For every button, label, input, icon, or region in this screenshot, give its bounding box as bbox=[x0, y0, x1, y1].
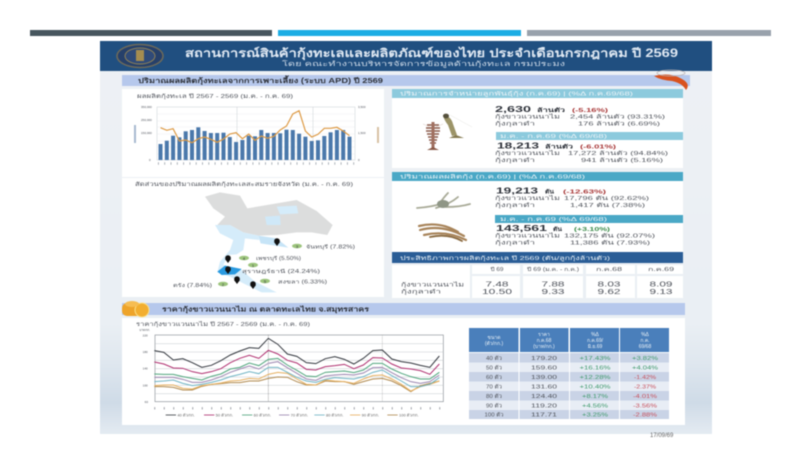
price table: +3.25% bbox=[582, 412, 608, 418]
price table: 80 ตัว bbox=[486, 393, 502, 400]
price table: 70 ตัว bbox=[486, 384, 502, 390]
price table bbox=[469, 328, 669, 419]
panel: price line chart bbox=[122, 318, 685, 425]
price table: (บาท/กก.) bbox=[533, 344, 555, 350]
price table: +12.28% bbox=[580, 375, 611, 381]
price table: มิ.ย.69 bbox=[588, 343, 602, 350]
combo bar and line chart: 0 bbox=[358, 158, 360, 162]
production heading: ปริมาณผลผลิตกุ้ง (ก.ค.69) | (%Δ ก.ค.69/68) bbox=[400, 174, 585, 180]
top accent bars bbox=[30, 30, 771, 36]
production year to date figures bbox=[495, 224, 655, 246]
panel: production efficiency table: 8.09 bbox=[650, 282, 673, 288]
price table: +3.82% bbox=[632, 356, 658, 362]
panel: shrimp output chart bbox=[122, 89, 384, 177]
panel: production efficiency table: ก.ค.68 bbox=[596, 267, 622, 273]
chart legend: 100 ตัว/กก. bbox=[399, 412, 419, 417]
price table: +10.40% bbox=[580, 384, 611, 390]
fry year to date figures bbox=[495, 142, 668, 164]
panel: shrimp production bbox=[392, 172, 683, 252]
price table: ก.ค. bbox=[640, 338, 650, 344]
province labels: เพชรบุรี (5.50%) bbox=[256, 255, 301, 262]
panel: production efficiency table: ประสิทธิภาพการผลิตกุ้งทะเล ปี 2569 (ตัน/ลูกกุ้งล้านตัว) bbox=[400, 255, 610, 262]
price table: -4.01% bbox=[633, 394, 657, 400]
price table: ขนาด bbox=[488, 335, 500, 341]
price table: 69/68 bbox=[639, 344, 651, 350]
price line chart: บาท/กก. bbox=[139, 328, 150, 332]
chart legend: 40 ตัว/กก. bbox=[177, 412, 195, 417]
header banner bbox=[100, 41, 712, 71]
chart legend: 60 ตัว/กก. bbox=[254, 412, 271, 417]
panel: production efficiency table: 8.03 bbox=[598, 282, 621, 288]
combo bar and line chart: 3,500 bbox=[358, 105, 366, 109]
price table: %Δ bbox=[641, 332, 650, 338]
section heading: shrimp price: ราคากุ้งขาวแวนนาไม ณ ตลาดทะเลไทย จ.สมุทรสาคร bbox=[162, 304, 370, 314]
production July figures: 19,213 bbox=[496, 186, 539, 196]
production July figures bbox=[495, 186, 649, 209]
price line chart: 140 bbox=[143, 367, 148, 371]
fry July figures: (-5.16%) bbox=[572, 108, 609, 114]
province labels: 2 bbox=[222, 282, 225, 287]
fry July figures: 176 ล้านตัว (6.69%) bbox=[578, 120, 660, 128]
panel: fry distribution: ม.ค. - ก.ค.69 (%Δ 69/68) bbox=[500, 134, 607, 140]
panel: production efficiency table: ปี 69 (ม.ค. - ก.ค.) bbox=[527, 266, 579, 273]
combo bar and line chart: 350,000 bbox=[141, 105, 152, 109]
chart legend bbox=[166, 412, 419, 417]
price table: +4.56% bbox=[582, 404, 608, 410]
combo bar and line chart: 1,500 bbox=[358, 131, 366, 135]
price chart title: ราคากุ้งขาวแวนนาไม ปี 2567 - 2569 (ม.ค. - ก.ค. 69) bbox=[136, 321, 310, 328]
price table: -1.42% bbox=[634, 375, 656, 381]
price table: 117.71 bbox=[531, 412, 557, 418]
panel: production efficiency table: 9.62 bbox=[598, 289, 621, 296]
panel: production efficiency table: ปี 69 bbox=[490, 266, 504, 273]
price table: 159.60 bbox=[531, 366, 557, 372]
panel: production efficiency table: กุ้งกุลาดำ bbox=[401, 288, 441, 296]
panel: fry distribution bbox=[392, 89, 683, 168]
province labels bbox=[173, 244, 355, 289]
price table: 139.00 bbox=[531, 375, 557, 381]
panel: shrimp production: ม.ค. - ก.ค.69 (%Δ 69/68) bbox=[500, 217, 607, 223]
panel: production efficiency table: 7.88 bbox=[542, 282, 565, 288]
fry year to date figures: ล้านตัว bbox=[545, 142, 573, 150]
price table: 40 ตัว bbox=[486, 355, 502, 362]
fry July figures: กุ้งขาวแวนนาไม bbox=[495, 114, 561, 120]
fry July figures: 2,630 bbox=[495, 105, 532, 114]
price table: (ตัว/กก.) bbox=[485, 341, 503, 347]
icon: shrimp fry bbox=[423, 114, 472, 150]
production year to date figures: 11,386 ตัน (7.93%) bbox=[570, 240, 650, 246]
province labels: 4 bbox=[243, 256, 246, 261]
price line chart: 220 bbox=[143, 333, 148, 337]
production July figures: (-12.63%) bbox=[563, 190, 607, 196]
fry year to date figures: 17,272 ล้านตัว (94.84%) bbox=[568, 150, 668, 157]
fry July figures: 2,454 ล้านตัว (93.31%) bbox=[570, 114, 665, 120]
fry year to date figures: กุ้งขาวแวนนาไม bbox=[495, 150, 561, 157]
production year to date figures: กุ้งกุลาดำ bbox=[495, 240, 535, 246]
price table: +4.04% bbox=[632, 366, 658, 372]
panel: production efficiency table: กุ้งขาวแวนนาไม bbox=[401, 282, 465, 288]
price line chart bbox=[139, 328, 444, 417]
production July figures: 1,417 ตัน (7.38%) bbox=[570, 202, 645, 209]
chart title: ผลผลิตกุ้งทะเล ปี 2567 - 2569 (ม.ค. - ก.ค. 69) bbox=[137, 93, 293, 100]
production July figures: ตัน bbox=[545, 188, 554, 196]
price table: +16.16% bbox=[580, 366, 611, 372]
combo bar and line chart: 150,000 bbox=[141, 131, 152, 135]
price table: ก.ค.68 bbox=[537, 338, 552, 344]
chart legend: 80 ตัว/กก. bbox=[326, 412, 343, 417]
panel: production efficiency table: 10.50 bbox=[482, 289, 512, 296]
panel: production efficiency table: 9.13 bbox=[650, 289, 673, 296]
price table: ก.ค.69/ bbox=[587, 338, 604, 344]
price table: ราคา bbox=[538, 332, 550, 338]
price table: 131.60 bbox=[531, 384, 557, 390]
chart legend: 50 ตัว/กก. bbox=[216, 412, 233, 417]
fry year to date figures: 18,213 bbox=[497, 142, 540, 150]
province pins bbox=[225, 238, 280, 289]
icon: red shrimp bbox=[654, 70, 688, 90]
province labels: ตรัง (7.84%) bbox=[173, 283, 212, 289]
price table: 179.20 bbox=[531, 356, 557, 362]
title: สถานการณ์สินค้ากุ้งทะเลและผลิตภัณฑ์ของไทย ประจำเดือนกรกฎาคม ปี 2569 bbox=[185, 46, 678, 61]
production July figures: กุ้งกุลาดำ bbox=[495, 202, 535, 209]
panel: province share map bbox=[122, 178, 384, 297]
province labels: 3 bbox=[296, 244, 299, 249]
production year to date figures: ตัน bbox=[553, 226, 562, 233]
chart legend: 70 ตัว/กก. bbox=[291, 412, 308, 417]
price line chart: 60 bbox=[145, 400, 148, 404]
panel: production efficiency table: ก.ค.69 bbox=[648, 267, 674, 273]
province labels: 1 bbox=[252, 263, 255, 268]
price table: +17.43% bbox=[580, 356, 611, 362]
fry July figures: ล้านตัว bbox=[537, 106, 565, 114]
combo bar and line chart bbox=[134, 105, 379, 164]
slide date: 17/09/69 bbox=[650, 433, 674, 439]
infographic background bbox=[100, 41, 712, 434]
fry heading: ปริมาณการจำหน่ายลูกพันธุ์กุ้ง (ก.ค.69) | (%Δ ก.ค.69/68) bbox=[400, 90, 633, 98]
price table: %Δ bbox=[591, 332, 600, 338]
chart legend: 90 ตัว/กก. bbox=[362, 412, 379, 417]
map title: สัดส่วนของปริมาณผลผลิตกุ้งทะเลสะสมรายจังหวัด (ม.ค. - ก.ค. 69) bbox=[135, 181, 353, 188]
section heading: aquaculture output: ปริมาณผลผลิตกุ้งทะเลจากการเพาะเลี้ยง (ระบบ APD) ปี 2569 bbox=[138, 74, 383, 85]
combo bar and line chart: 250,000 bbox=[141, 118, 152, 122]
panel: production efficiency table bbox=[392, 252, 683, 298]
fry year to date figures: (-6.01%) bbox=[580, 144, 617, 150]
price table: -3.56% bbox=[633, 404, 657, 410]
production year to date figures: (+3.10%) bbox=[574, 227, 611, 233]
fry year to date figures: กุ้งกุลาดำ bbox=[495, 157, 535, 164]
province labels: 5 bbox=[264, 279, 267, 284]
panel: production efficiency table: 7.48 bbox=[486, 282, 509, 288]
production year to date figures: 132,175 ตัน (92.07%) bbox=[564, 232, 655, 240]
section heading: shrimp price bbox=[122, 303, 685, 315]
subtitle: โดย คณะทำงานบริหารจัดการข้อมูลด้านกุ้งทะเล กรมประมง bbox=[282, 60, 565, 68]
panel: production efficiency table: 9.33 bbox=[542, 289, 565, 296]
fry July figures bbox=[495, 105, 665, 128]
production year to date figures: 143,561 bbox=[496, 224, 548, 233]
icon: harvested shrimp bbox=[417, 193, 470, 241]
province labels: สงขลา (6.33%) bbox=[278, 280, 327, 286]
price line chart: 100 bbox=[143, 383, 148, 387]
price table: -2.37% bbox=[634, 384, 656, 390]
price table: 50 ตัว bbox=[486, 364, 502, 372]
price table: -2.88% bbox=[633, 412, 657, 418]
production July figures: 17,796 ตัน (92.62%) bbox=[564, 195, 649, 202]
price line chart: 180 bbox=[143, 350, 148, 354]
price table: 119.20 bbox=[531, 404, 557, 410]
price table: +8.17% bbox=[582, 394, 608, 400]
price table: 124.40 bbox=[531, 394, 557, 400]
fry July figures: กุ้งกุลาดำ bbox=[495, 120, 535, 128]
icon: gold coins bbox=[122, 301, 149, 317]
production year to date figures: กุ้งขาวแวนนาไม bbox=[495, 232, 561, 240]
province labels: สุราษฎร์ธานี (24.24%) bbox=[242, 268, 321, 275]
fry year to date figures: 941 ล้านตัว (5.16%) bbox=[581, 157, 663, 164]
price table: 100 ตัว bbox=[484, 412, 504, 418]
icon: department seal bbox=[117, 44, 163, 68]
price table: 60 ตัว bbox=[486, 374, 502, 381]
combo bar and line chart: 0 bbox=[149, 158, 151, 162]
production July figures: กุ้งขาวแวนนาไม bbox=[495, 195, 561, 202]
province labels: จันทบุรี (7.82%) bbox=[306, 244, 355, 250]
price table: 90 ตัว bbox=[486, 402, 502, 410]
section heading: aquaculture output bbox=[122, 74, 690, 86]
map of Thailand bbox=[205, 192, 333, 292]
